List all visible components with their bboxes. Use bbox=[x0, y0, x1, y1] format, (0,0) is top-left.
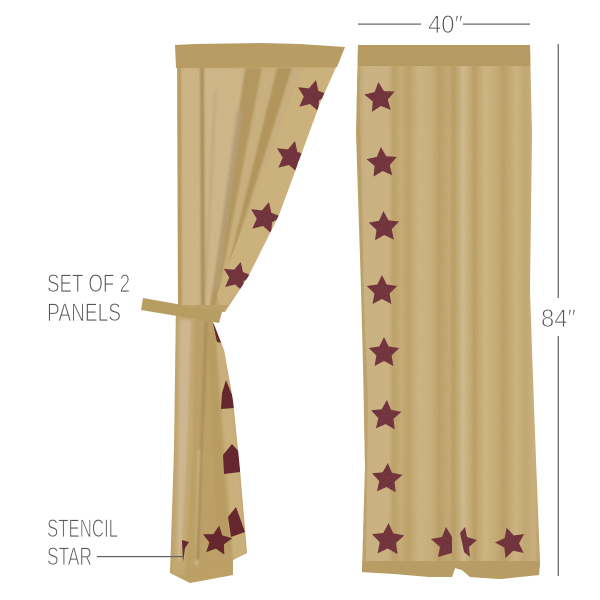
header band bbox=[356, 44, 532, 66]
lower left partial stars bbox=[182, 323, 245, 562]
upper left curtain fabric bbox=[175, 46, 345, 312]
label: set of 2 panels: PANELS bbox=[47, 299, 121, 327]
fabric grain bbox=[357, 66, 539, 561]
right curtain panel bbox=[350, 40, 545, 585]
left curtain panel (tied back) bbox=[141, 40, 350, 585]
right curtain stars bbox=[363, 80, 529, 560]
height dimension: 84 inches: 84″ bbox=[541, 305, 576, 333]
label: stencil star with leader line bbox=[47, 515, 183, 571]
tie back strap bbox=[141, 298, 222, 323]
fabric grain bbox=[178, 68, 323, 304]
lower left curtain fabric bbox=[170, 305, 247, 583]
left curtain header band bbox=[175, 43, 345, 68]
label: stencil star with leader line: STAR bbox=[47, 543, 92, 571]
label: stencil star with leader line: STENCIL bbox=[47, 515, 118, 543]
label: set of 2 panels bbox=[47, 270, 130, 327]
bottom hem bbox=[362, 561, 540, 579]
side hems bbox=[356, 69, 368, 565]
label: set of 2 panels: SET OF 2 bbox=[47, 270, 130, 298]
width dimension: 40 inches: 40″ bbox=[428, 11, 463, 39]
upper left stars bbox=[224, 80, 324, 289]
fabric grain bbox=[210, 386, 240, 546]
right curtain fabric bbox=[350, 40, 545, 585]
